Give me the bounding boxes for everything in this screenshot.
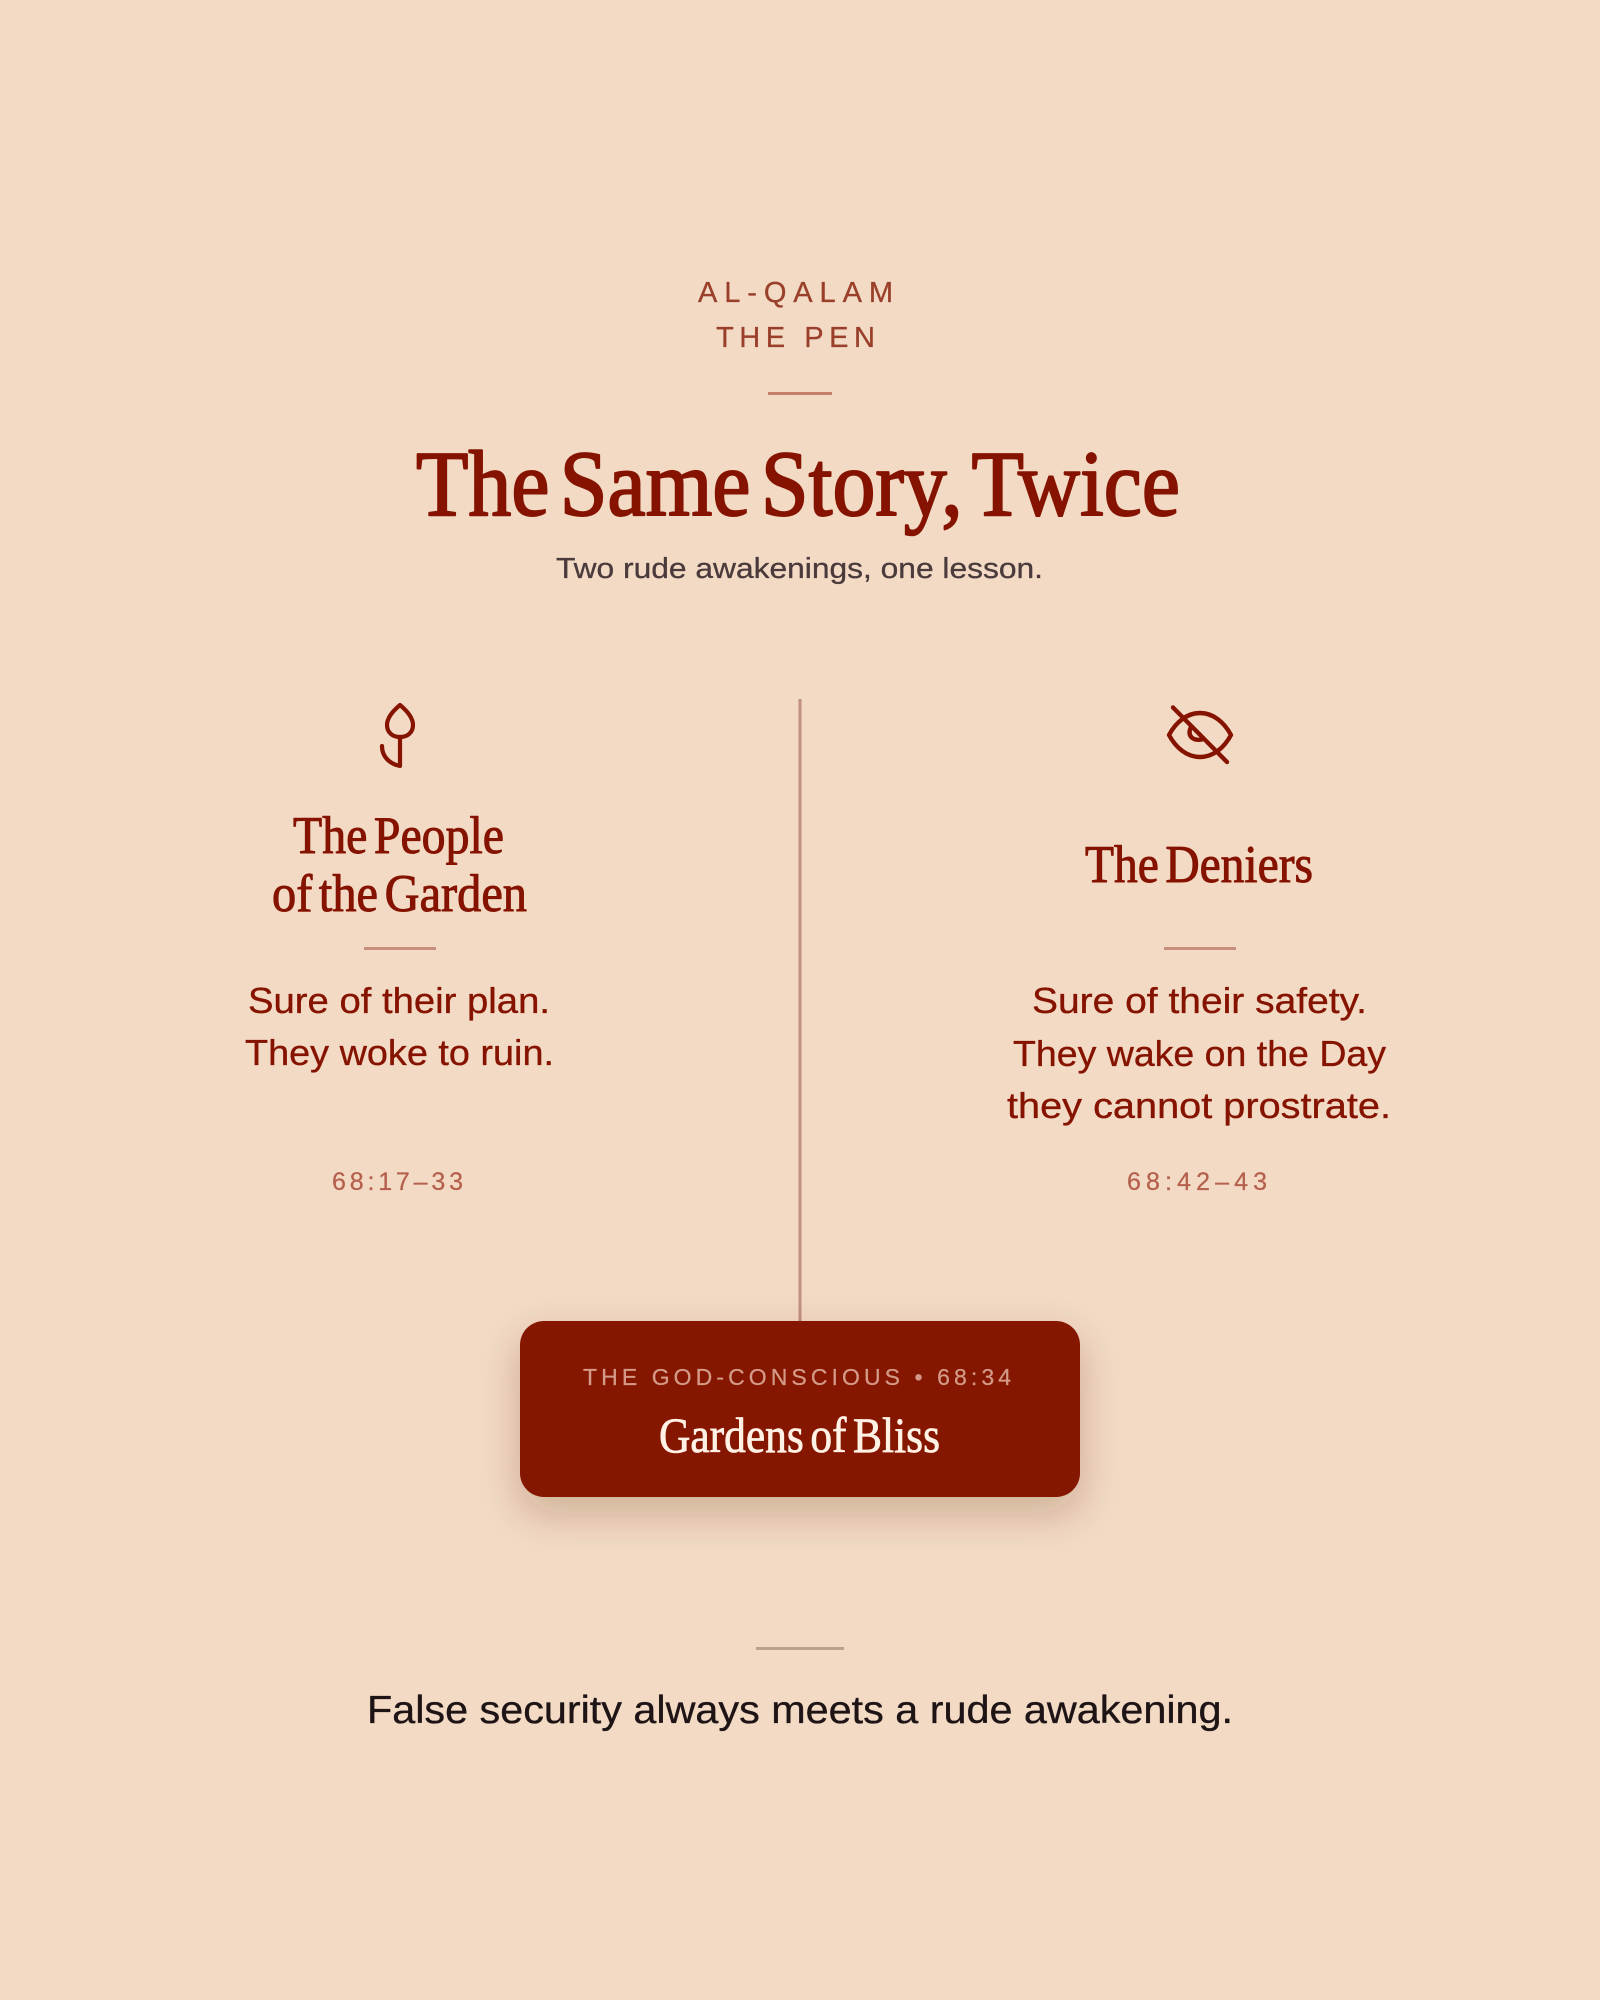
heading: The People [293, 807, 504, 865]
heading [272, 807, 527, 923]
subtitle: Two rude awakenings, one lesson. [556, 553, 1043, 585]
description: They wake on the Day [1013, 1033, 1386, 1074]
heading: The Deniers [1085, 836, 1313, 894]
eyebrow: surah name [698, 277, 893, 354]
description [245, 980, 554, 1073]
callout: gardens of bliss [520, 1321, 1080, 1497]
header [416, 277, 1180, 585]
heading rule [364, 947, 436, 950]
description: They woke to ruin. [245, 1032, 554, 1073]
icon: crossed-out eye [1169, 708, 1231, 762]
callout title: Gardens of Bliss [659, 1407, 940, 1463]
panel: the people of the garden [245, 705, 554, 1196]
heading rule [1164, 947, 1236, 950]
centre divider line [798, 699, 802, 1321]
header rule [768, 392, 832, 395]
eyebrow: surah name: THE PEN [716, 322, 875, 354]
description [1007, 980, 1391, 1126]
takeaway line: False security always meets a rude awakening. [367, 1689, 1233, 1732]
footer [367, 1647, 1233, 1732]
verse reference: 68:17–33 [332, 1168, 463, 1196]
panel: the deniers [1007, 708, 1391, 1196]
verse reference: 68:42–43 [1127, 1168, 1267, 1196]
heading: of the Garden [272, 865, 527, 923]
description: Sure of their safety. [1032, 980, 1367, 1021]
callout label: THE GOD-CONSCIOUS • 68:34 [583, 1364, 1011, 1390]
icon: sprout [382, 705, 413, 766]
callout card [520, 1321, 1080, 1497]
eyebrow: surah name: AL-QALAM [698, 277, 893, 309]
description: they cannot prostrate. [1007, 1085, 1391, 1126]
title: The Same Story, Twice [416, 433, 1180, 536]
description: Sure of their plan. [248, 980, 550, 1021]
footer rule [756, 1647, 844, 1650]
